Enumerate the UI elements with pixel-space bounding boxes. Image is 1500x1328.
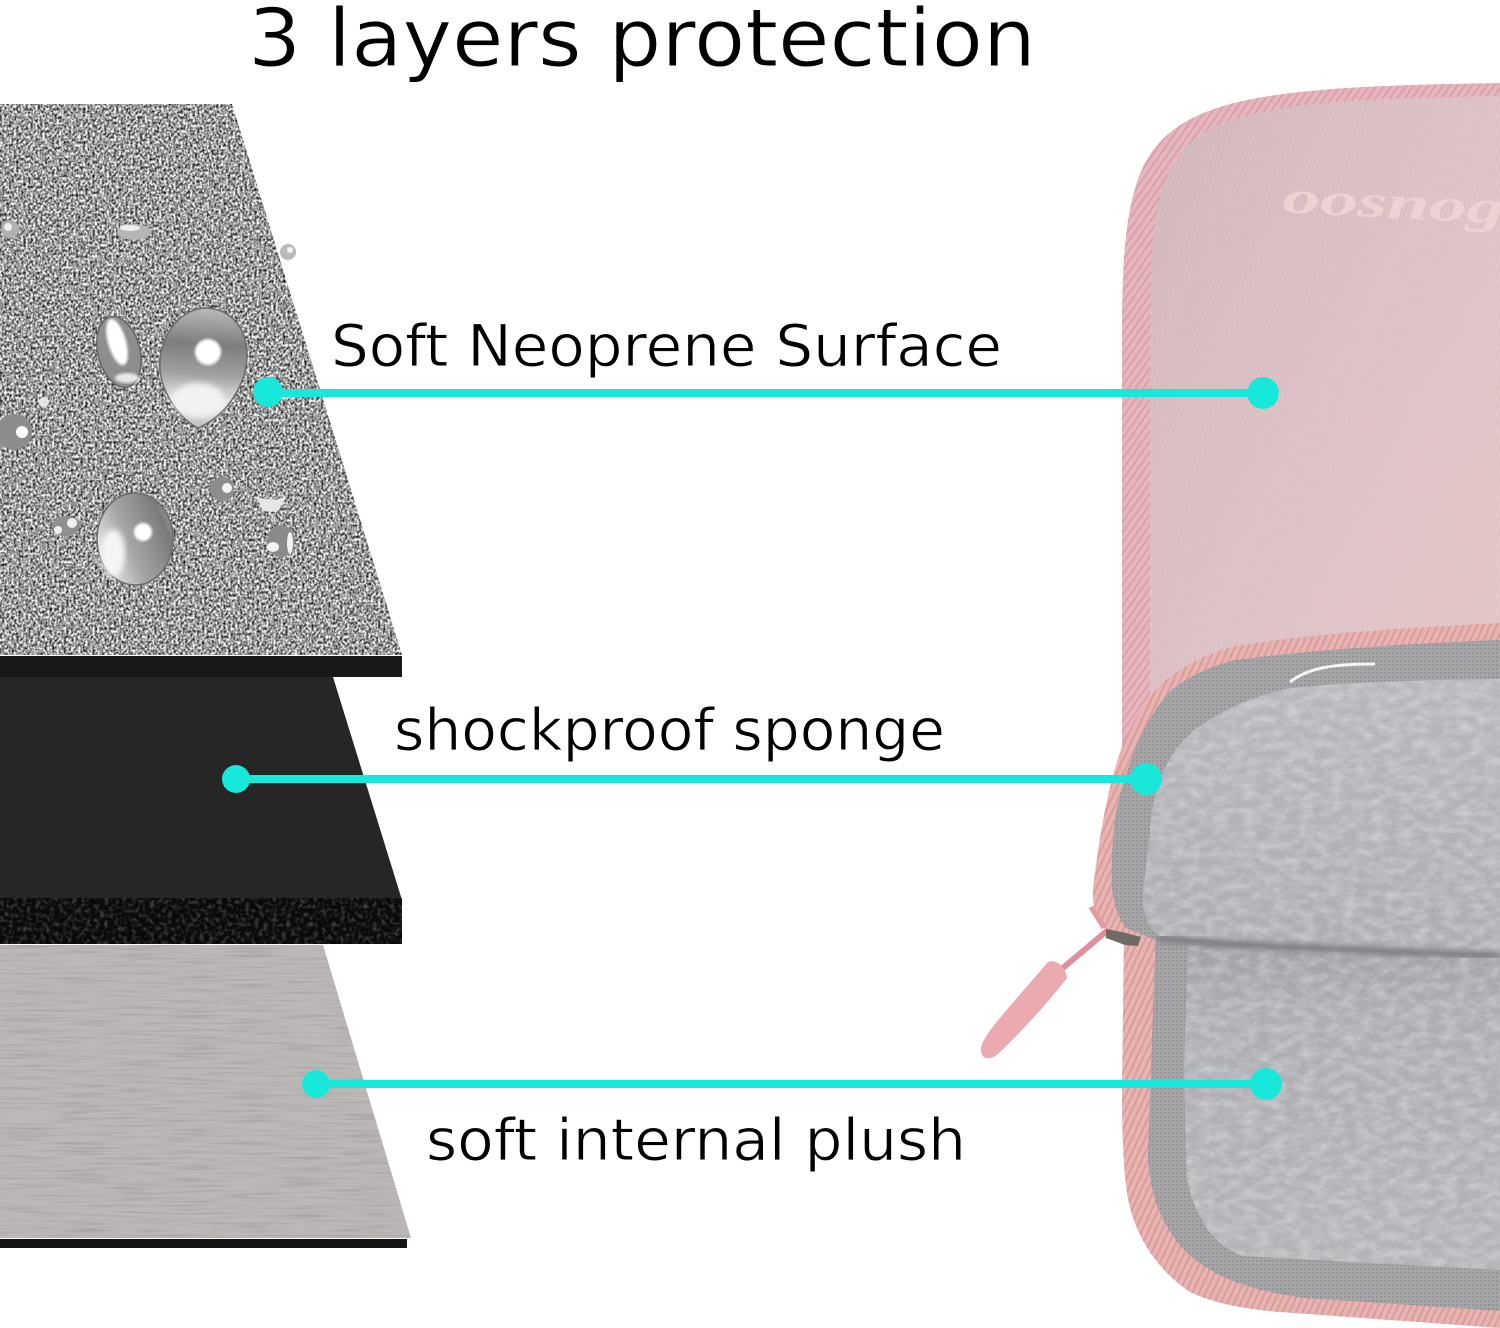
layer: shockproof sponge xyxy=(0,677,402,944)
connector line xyxy=(222,763,1162,795)
panel: pink laptop sleeve xyxy=(981,83,1500,1328)
small droplets xyxy=(0,220,296,557)
left tall droplet xyxy=(90,312,148,392)
pocket flap zipper xyxy=(1093,623,1500,940)
layer: neoprene surface with water droplets xyxy=(0,104,402,677)
inner fleece xyxy=(1184,945,1500,1270)
lower zipper xyxy=(1122,930,1500,1328)
label: shockproof sponge xyxy=(394,696,945,764)
label: soft internal plush xyxy=(426,1106,966,1174)
pocket flap fleece xyxy=(1143,679,1500,954)
callout: shockproof sponge xyxy=(222,696,1162,795)
inner mesh lining xyxy=(1148,930,1500,1311)
callout: soft internal plush xyxy=(302,1068,1282,1174)
ribbed fabric texture xyxy=(1150,96,1500,760)
icon: zipper pull xyxy=(981,907,1141,1058)
large droplet xyxy=(160,308,247,428)
icon: water droplets xyxy=(0,220,296,585)
glossy highlight xyxy=(1290,664,1375,682)
callout: Soft Neoprene Surface xyxy=(253,312,1279,409)
label: Soft Neoprene Surface xyxy=(331,312,1002,380)
connector line xyxy=(302,1068,1282,1100)
layer: internal plush xyxy=(0,945,411,1248)
sleeve front surface xyxy=(1150,96,1500,760)
lower droplet xyxy=(97,493,173,585)
sleeve zipper outline, upper xyxy=(1122,83,1500,800)
connector line xyxy=(253,377,1279,409)
fold shadow xyxy=(1158,938,1500,956)
pocket flap lining xyxy=(1112,640,1500,950)
brand logo: oosnog xyxy=(1281,171,1500,234)
panel: fabric layer stack xyxy=(0,104,411,1248)
